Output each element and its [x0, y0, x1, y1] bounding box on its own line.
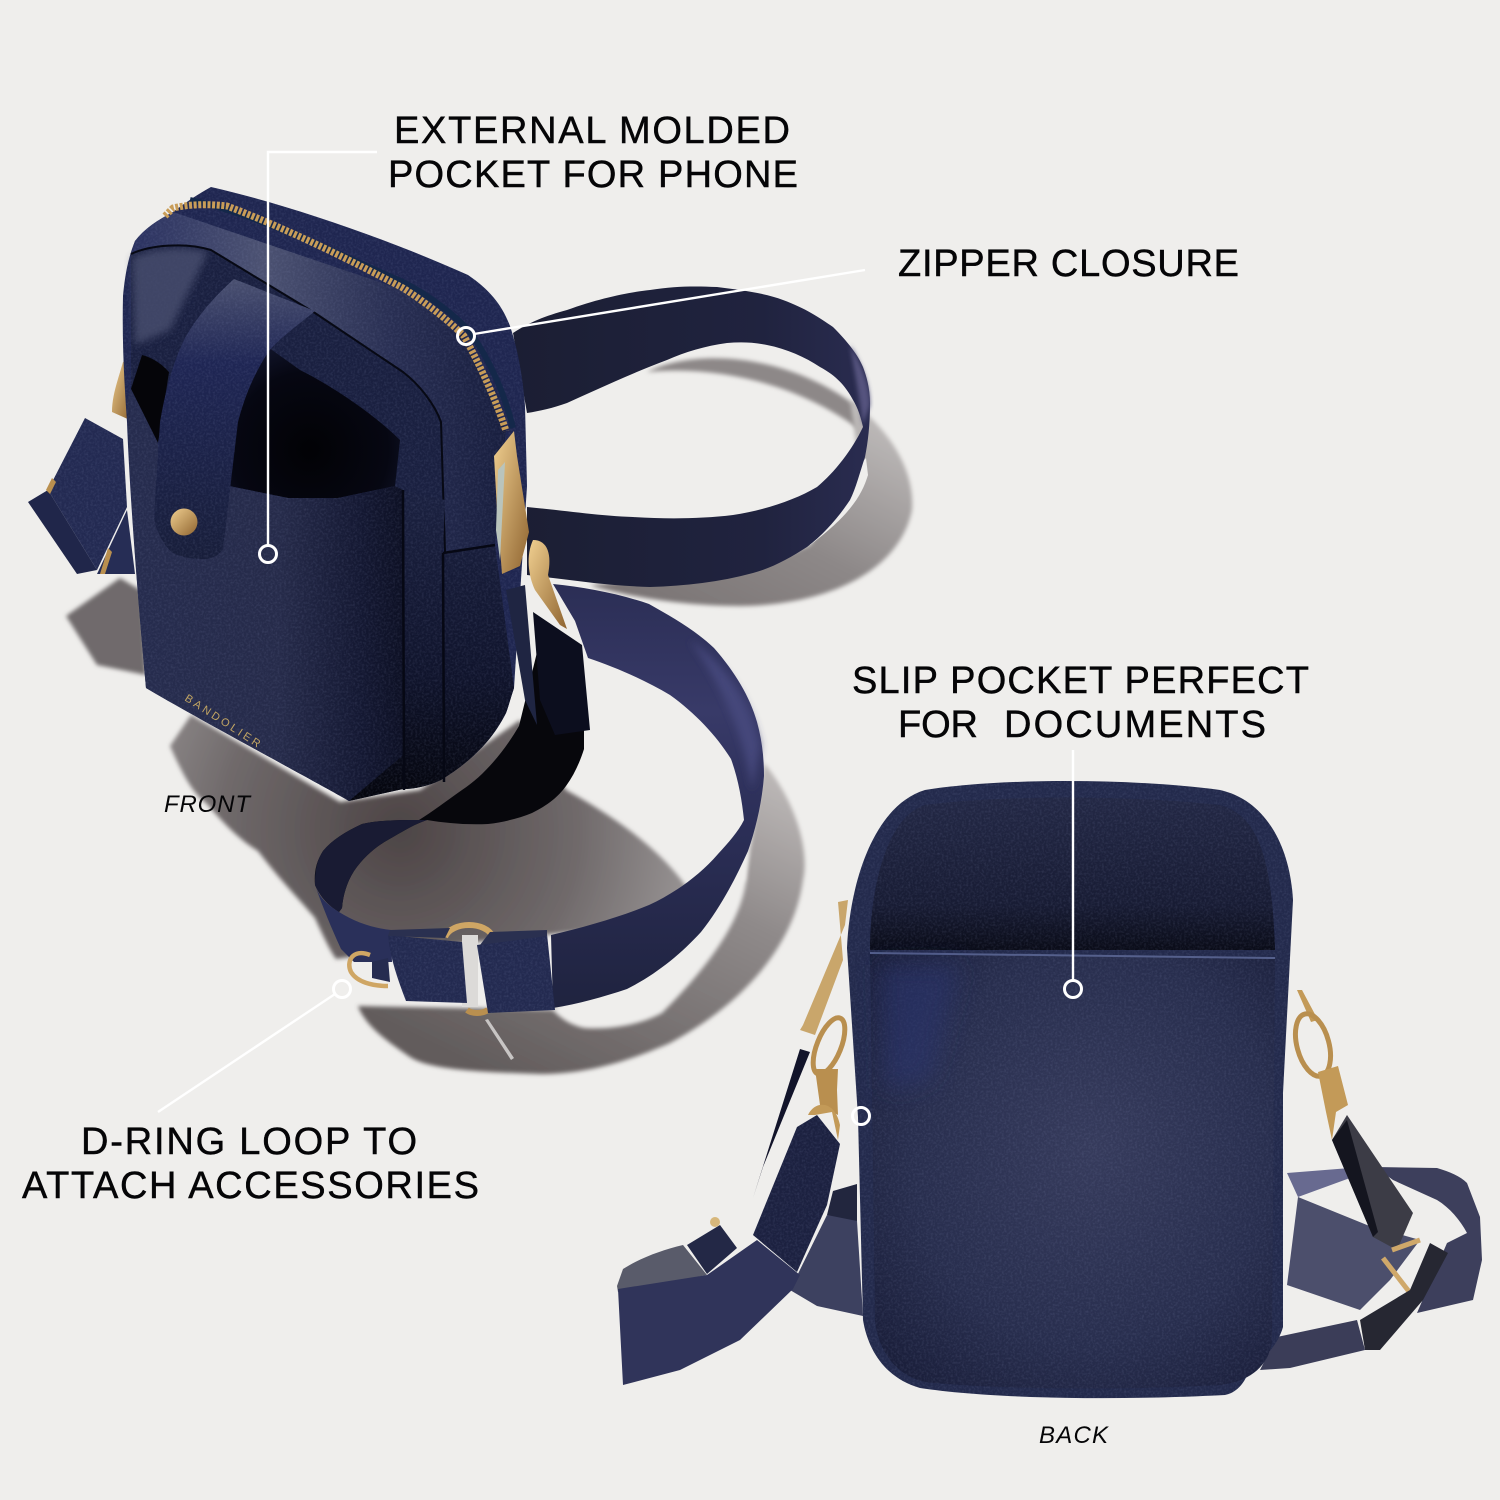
back strap left [617, 1184, 863, 1385]
flap tab [154, 279, 315, 559]
caption: back: BACK [1039, 1422, 1109, 1449]
side gusset [349, 490, 514, 801]
marker: back bag hardware [852, 1108, 870, 1124]
marker: slip pocket [1064, 980, 1082, 998]
heading: d-ring: ATTACH ACCESSORIES [22, 1165, 479, 1207]
strap sheen [850, 345, 870, 425]
marker: pocket [260, 546, 276, 562]
leader line: pocket [268, 152, 377, 545]
leather zipper tail [506, 585, 537, 725]
heading: zipper: ZIPPER CLOSURE [898, 243, 1239, 285]
callout: d-ring loop [22, 980, 479, 1207]
marker: d-ring [334, 980, 350, 998]
phone pocket opening [229, 345, 400, 498]
caption: front: FRONT [164, 791, 252, 818]
heading: slip pocket: FOR [898, 704, 978, 746]
left adjuster strap [28, 358, 135, 574]
upper strap [513, 286, 870, 587]
callout: zipper closure [458, 243, 1239, 344]
back bag photo [617, 781, 1482, 1398]
strap twist underside [315, 640, 584, 912]
heading: pocket: EXTERNAL MOLDED [394, 110, 790, 152]
strap end to buckle [315, 885, 392, 962]
zipper teeth [165, 205, 506, 431]
heading: slip pocket: DOCUMENTS [1004, 704, 1266, 746]
back slip pocket [870, 952, 1275, 1388]
pocket left sheen [880, 965, 960, 1090]
leader line: slip pocket [1072, 750, 1074, 980]
dark side strap-end tab [533, 612, 590, 735]
heading: slip pocket: SLIP POCKET PERFECT [852, 660, 1309, 702]
zipper pull [494, 431, 529, 574]
bag body [847, 781, 1293, 1398]
snap [170, 508, 198, 536]
top leather band [131, 212, 506, 552]
bag body [123, 187, 527, 801]
zipper tape [190, 200, 513, 428]
pocket seam shadow [131, 245, 445, 552]
pocket edge highlight [870, 953, 1275, 958]
buckle [349, 925, 555, 1013]
back strap right [1260, 1167, 1482, 1370]
leader line: zipper [474, 270, 865, 334]
heading: d-ring: D-RING LOOP TO [81, 1121, 417, 1163]
right hardware [1289, 990, 1448, 1350]
front bag photo [28, 187, 912, 1074]
heading: pocket: POCKET FOR PHONE [388, 154, 798, 196]
callout: slip pocket [852, 660, 1309, 998]
upper back panel [870, 798, 1275, 950]
lower strap [551, 584, 764, 1008]
left hardware [753, 900, 851, 1272]
back panel of bag [131, 245, 445, 555]
gusset seams [403, 490, 495, 790]
marker: zipper [458, 328, 474, 344]
strap sheen lower [690, 640, 760, 790]
logo: BANDOLIER [182, 692, 265, 752]
front pocket panel [127, 389, 403, 801]
cast shadows [66, 358, 912, 1074]
callout: external molded pocket [260, 110, 798, 562]
leader line: d-ring [158, 994, 335, 1112]
carabiner [529, 540, 567, 629]
